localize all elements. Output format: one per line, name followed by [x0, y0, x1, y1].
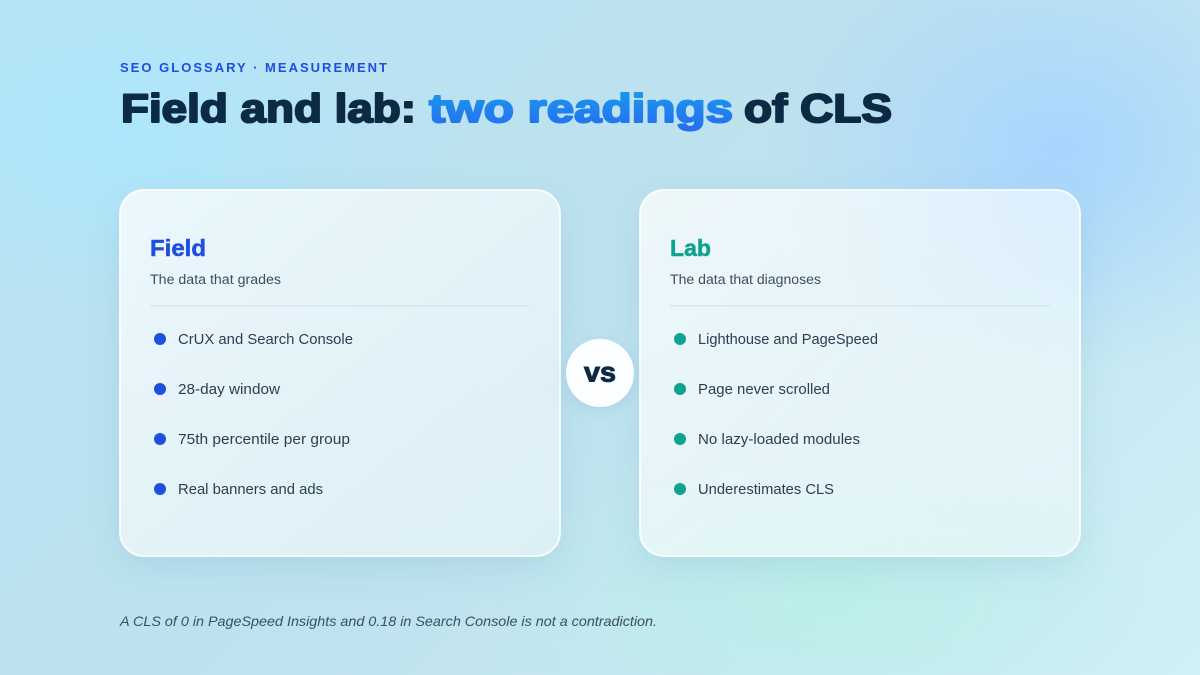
- field heading: Field: [150, 235, 206, 261]
- title: Field and lab:: [121, 87, 416, 131]
- lab list: Page never scrolled: [698, 382, 830, 398]
- field list: [154, 332, 353, 498]
- panel: lab: [640, 190, 1080, 556]
- eyebrow: SEO GLOSSARY · MEASUREMENT: [120, 60, 387, 75]
- infographic: [116, 63, 1086, 629]
- lab list: Lighthouse and PageSpeed: [698, 332, 878, 348]
- panel: field: [120, 190, 560, 556]
- field list: Real banners and ads: [178, 482, 323, 498]
- field list: 75th percentile per group: [178, 432, 350, 448]
- field subtitle: The data that grades: [150, 272, 281, 287]
- lab subtitle: The data that diagnoses: [670, 272, 821, 287]
- vs badge: vs: [584, 356, 616, 388]
- field list: 28-day window: [178, 382, 281, 398]
- field list: CrUX and Search Console: [178, 332, 353, 348]
- title: two readings: [429, 87, 733, 131]
- vs badge: [566, 339, 634, 407]
- lab list: [674, 332, 878, 498]
- lab list: No lazy-loaded modules: [698, 432, 860, 448]
- title: of CLS: [744, 87, 892, 131]
- title: [121, 87, 892, 131]
- footnote: A CLS of 0 in PageSpeed Insights and 0.18 in Search Console is not a contradiction.: [119, 613, 657, 629]
- lab list: Underestimates CLS: [698, 482, 834, 498]
- lab heading: Lab: [670, 235, 711, 261]
